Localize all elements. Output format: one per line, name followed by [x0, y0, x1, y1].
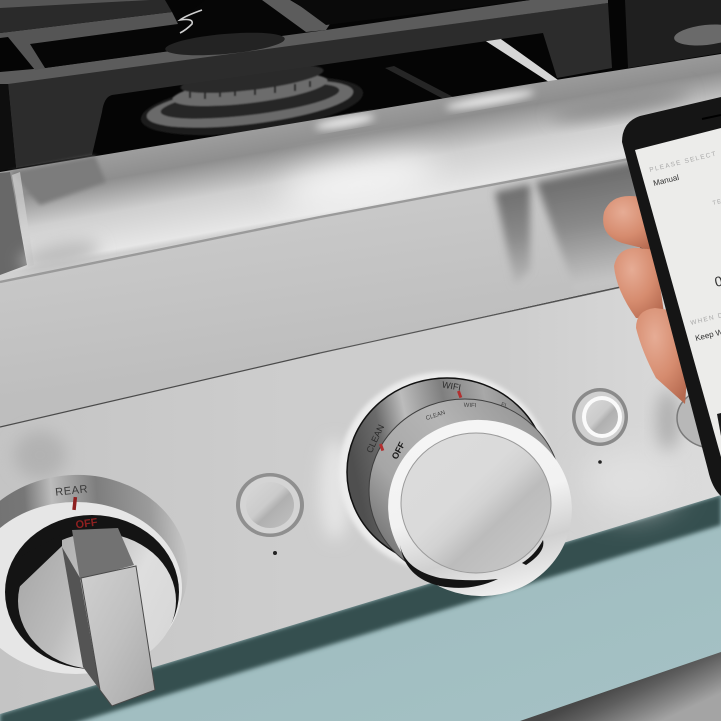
collar CLEAN label: CLEAN [425, 410, 446, 422]
grate: cast iron bars [0, 0, 721, 171]
indicator dot one [273, 551, 277, 555]
center button [236, 473, 304, 537]
hand fingers [603, 196, 690, 404]
collar FL label: FL [500, 402, 509, 410]
knurled collar [369, 399, 561, 581]
left knob shadow stem [62, 547, 100, 690]
left knob handle [81, 566, 155, 706]
left knob dark cut on disc [14, 534, 62, 592]
finger one [603, 196, 660, 250]
steel cooktop surface [0, 54, 721, 282]
upper CLEAN marker [379, 443, 384, 451]
screen label please select: PLEASE SELECT [649, 150, 718, 174]
grate dome reflection [164, 29, 286, 59]
upper CLEAN label: CLEAN [364, 423, 386, 454]
cross bar [262, 0, 330, 32]
left knob inner well [5, 515, 179, 669]
left knob neck [72, 528, 134, 580]
chrome ring dark reflection [400, 540, 543, 588]
right knob shadow [656, 390, 680, 450]
chrome front ring [374, 405, 586, 611]
teal floor [0, 480, 721, 721]
panel shadow on teal [0, 495, 721, 721]
label REAR: REAR [55, 483, 89, 499]
finger two [614, 248, 665, 320]
grate upper surface [0, 0, 608, 84]
screen black button [717, 413, 721, 436]
right pocket [292, 0, 530, 25]
burner: gas burner behind grate [138, 59, 366, 145]
label OFF: OFF [75, 517, 99, 532]
left burner knob [0, 467, 194, 706]
left grate edge [0, 84, 16, 171]
oven door edge [520, 652, 721, 721]
cast iron rib [0, 12, 178, 70]
left pocket [30, 0, 306, 68]
bright rod in opening [481, 37, 558, 84]
black cooktop background [0, 0, 721, 240]
indicator dot two [598, 460, 602, 464]
white wire [180, 10, 202, 33]
finger three [636, 308, 690, 404]
phone screen [635, 128, 721, 457]
upper WIFI label: WIFI [441, 379, 462, 393]
main smart knob [339, 372, 586, 611]
grate front face [8, 3, 612, 168]
left knob chrome lip [0, 502, 182, 674]
upper WIFI marker [457, 390, 462, 398]
red marker [72, 497, 77, 510]
control panel [0, 266, 721, 714]
earpiece [702, 115, 721, 119]
screen value manual: Manual [652, 173, 680, 188]
left knob inner disc [18, 533, 176, 669]
steel riser band [0, 157, 640, 427]
OFF collar label: OFF [390, 440, 407, 461]
right burner grate section [625, 0, 721, 68]
wifi button with glow ring [572, 388, 628, 446]
smartphone [622, 97, 721, 496]
right knob behind phone [677, 388, 721, 448]
phone body [622, 97, 721, 496]
left knob base ring [0, 467, 194, 677]
inner brushed disc [401, 433, 551, 573]
collar WIFI label: WIFI [464, 403, 477, 409]
outer cylinder [347, 378, 547, 566]
soft halo [339, 372, 551, 572]
